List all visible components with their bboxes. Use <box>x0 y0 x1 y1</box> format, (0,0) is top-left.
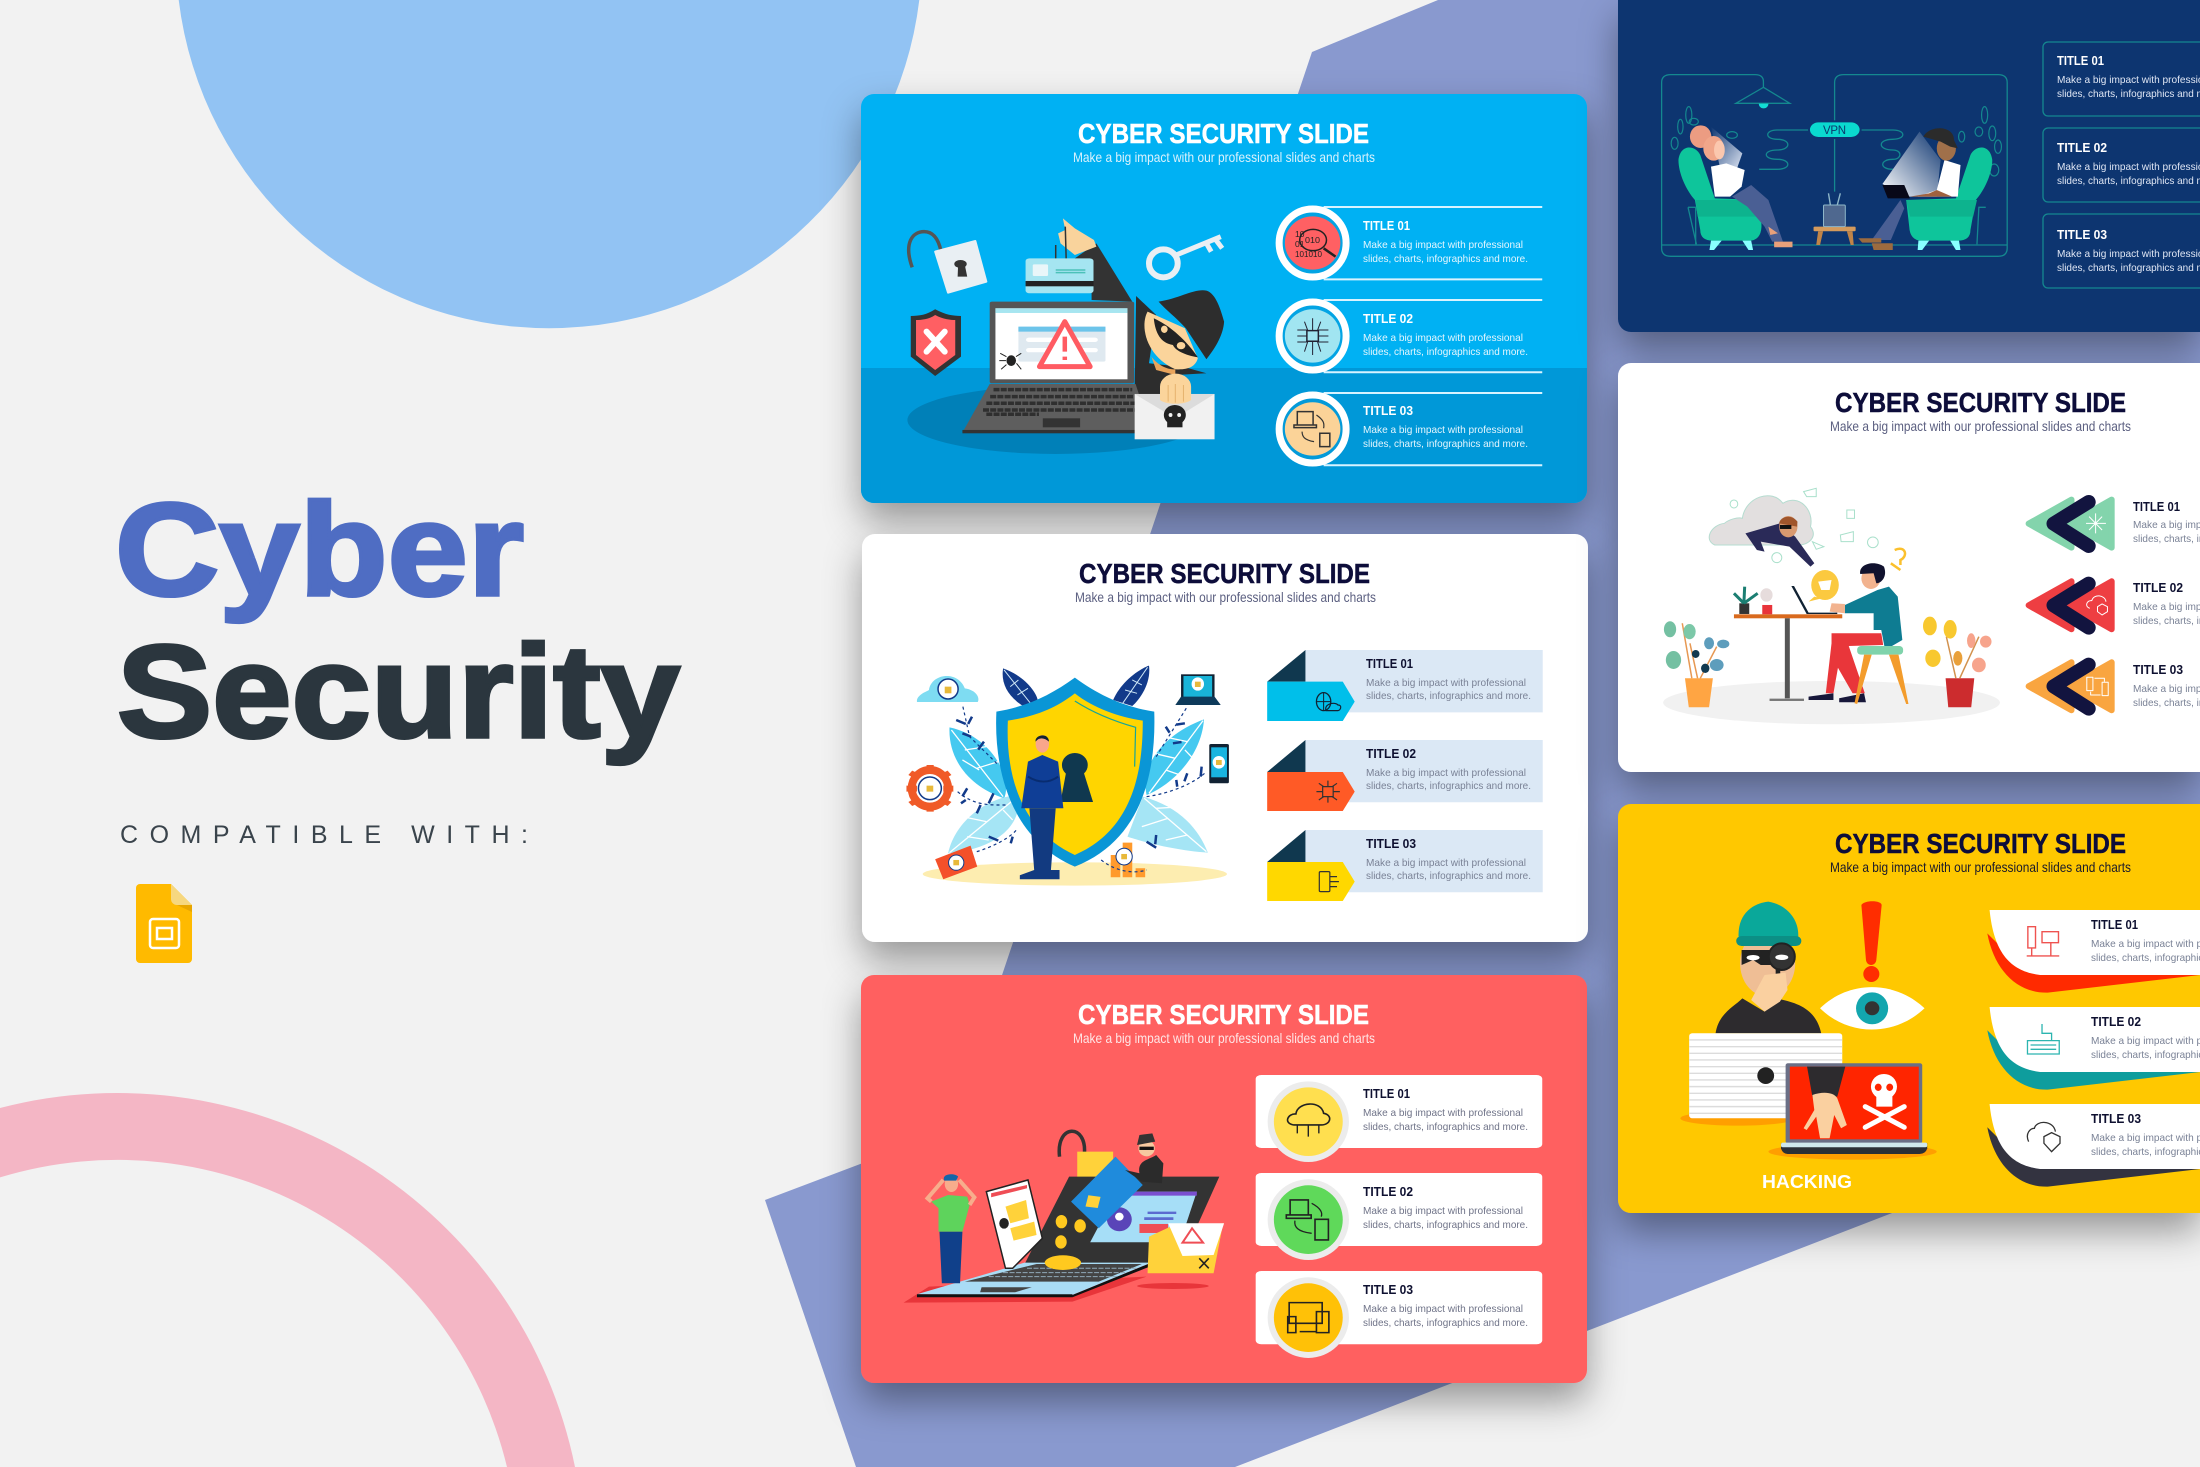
row 3 text <box>1366 836 1531 882</box>
subtitle: Make a big impact with our professional slides and charts <box>1075 589 1376 605</box>
row 2 text <box>1366 746 1531 792</box>
panel: white shield slide <box>862 534 1588 942</box>
binary digits in magnifier icon <box>1295 229 1322 259</box>
row 3 swoosh <box>1987 1104 2200 1187</box>
row 1 text <box>2057 53 2200 100</box>
heading: CYBER SECURITY SLIDE <box>1078 118 1369 149</box>
VPN label: VPN <box>1823 125 1846 137</box>
list: arrow chevron icons <box>2029 500 2112 710</box>
row 1 text: slides, charts, infographics and more. <box>1363 253 1528 265</box>
panel: yellow hacking slide <box>1618 804 2200 1213</box>
row 1 text <box>2133 499 2200 545</box>
row 2 text: TITLE 02 <box>1363 1184 1413 1199</box>
arrow icon 3 <box>2029 662 2112 710</box>
row 3 text: Make a big impact with professional <box>1363 424 1523 436</box>
row 1 text <box>2091 917 2200 964</box>
row 2 text: TITLE 02 <box>2057 140 2107 155</box>
heading: CYBER SECURITY SLIDE <box>1835 828 2126 859</box>
decorative light blue circle <box>179 0 919 328</box>
row 3 text <box>1363 403 1528 450</box>
panel: white phishing slide <box>1618 363 2200 772</box>
row 3 text: slides, charts, infographics and more. <box>1363 1317 1528 1329</box>
list: hacking slide rows <box>1987 910 2200 1187</box>
row 1 text: Make a big impact with professional <box>1366 677 1526 689</box>
illustration: hacker with magnifier <box>1680 901 1937 1160</box>
tab icon: globe and cloud <box>1267 682 1355 721</box>
row 1 text: TITLE 01 <box>1366 656 1413 671</box>
row 2 text: Make a big impact with professional <box>1363 1205 1523 1217</box>
row 1 text: Make a big impact with professional <box>1363 239 1523 251</box>
row 3 text <box>2091 1111 2200 1158</box>
row 1 swoosh <box>1987 910 2200 993</box>
heading: CYBER SECURITY SLIDE <box>1835 387 2126 418</box>
row 3 text: TITLE 03 <box>2057 227 2107 242</box>
illustration: laptop attack <box>904 1131 1224 1303</box>
decorative pink ring <box>0 1093 575 1467</box>
icon circle: responsive devices <box>1268 1277 1349 1358</box>
compatible with label: COMPATIBLE WITH: <box>120 821 528 849</box>
HACKING label: HACKING <box>1762 1172 1852 1192</box>
arrow icon 1 <box>2029 500 2112 548</box>
row 1 text: TITLE 01 <box>1363 218 1410 233</box>
row 1 text: TITLE 01 <box>1363 1086 1410 1101</box>
row 1 text <box>1366 656 1531 702</box>
row 2 text <box>1363 1184 1528 1231</box>
panel: blue slide <box>861 94 1587 503</box>
illustration: shield and man <box>906 666 1229 886</box>
row 2 text: Make a big impact with professional <box>1363 332 1523 344</box>
row 2 text: slides, charts, infographics and more. <box>1363 346 1528 358</box>
row 3 text: slides, charts, infographics and more. <box>1363 438 1528 450</box>
row 3 text: Make a big impact with professional <box>1363 1303 1523 1315</box>
floor band <box>861 368 1587 503</box>
subtitle: Make a big impact with our professional slides and charts <box>1073 1030 1375 1046</box>
row 2 text: slides, charts, infographics and more. <box>1366 780 1531 792</box>
arrow icon 2 <box>2029 581 2112 629</box>
row 1 text: TITLE 01 <box>2091 917 2138 932</box>
row 1 text <box>1363 1086 1528 1133</box>
decorative purple shape <box>765 0 2200 1467</box>
illustration: phishing at desk <box>1663 488 2000 724</box>
binary digits in magnifier icon: 01 <box>1295 239 1305 249</box>
heading: CYBER SECURITY SLIDE <box>1079 558 1370 589</box>
row 2 text: TITLE 02 <box>2091 1014 2141 1029</box>
row 3 text: TITLE 03 <box>1363 1282 1413 1297</box>
row 2 text <box>2057 140 2200 187</box>
subtitle: Make a big impact with our professional slides and charts <box>1073 149 1375 165</box>
row 2 text: slides, charts, infographics and more. <box>1363 1219 1528 1231</box>
row 1 text <box>1363 218 1528 265</box>
subtitle: Make a big impact with our professional slides and charts <box>1830 418 2131 434</box>
icon circle: cloud network <box>1268 1081 1349 1162</box>
row 3 text: TITLE 03 <box>2133 662 2183 677</box>
row 2 text <box>2133 580 2200 627</box>
row 2 text <box>1363 311 1528 358</box>
row 3 text <box>2133 662 2200 709</box>
panel: red slide <box>861 975 1587 1383</box>
row 1 text: TITLE 01 <box>2057 53 2104 68</box>
row 3 text <box>1363 1282 1528 1329</box>
list: blue slide rows <box>1279 207 1542 465</box>
row 3 text: TITLE 03 <box>1366 836 1416 851</box>
tab icon: circuit <box>1267 772 1355 811</box>
binary digits in magnifier icon: 010 <box>1305 235 1320 245</box>
illustration: VPN remote workers <box>1662 75 2007 256</box>
row 2 text: Make a big impact with professional <box>1366 767 1526 779</box>
binary digits in magnifier icon: 101010 <box>1295 249 1322 259</box>
row 3 text: slides, charts, infographics and more. <box>1366 870 1531 882</box>
panel: navy VPN slide <box>1618 0 2200 332</box>
row 3 text: Make a big impact with professional <box>1366 857 1526 869</box>
row 2 swoosh <box>1987 1007 2200 1090</box>
icon circle: devices transfer <box>1268 1179 1349 1260</box>
heading: CYBER SECURITY SLIDE <box>1078 999 1369 1030</box>
row 2 text: TITLE 02 <box>2133 580 2183 595</box>
row 3 text: TITLE 03 <box>2091 1111 2141 1126</box>
main title: Cyber <box>115 476 524 623</box>
row 3 text <box>2057 227 2200 274</box>
subtitle: Make a big impact with our professional slides and charts <box>1830 859 2131 875</box>
main title <box>115 476 680 765</box>
list: navy slide rows <box>2043 42 2200 288</box>
row 1 text: Make a big impact with professional <box>1363 1107 1523 1119</box>
illustration: hacker with laptop <box>907 218 1224 454</box>
row 1 text: slides, charts, infographics and more. <box>1366 690 1531 702</box>
list: red slide rows <box>1256 1075 1542 1358</box>
row 3 text: TITLE 03 <box>1363 403 1413 418</box>
row 2 text: TITLE 02 <box>1366 746 1416 761</box>
list: shield slide rows <box>1267 650 1543 901</box>
binary digits in magnifier icon: 10 <box>1295 229 1305 239</box>
row icons and rules <box>1279 207 1542 465</box>
icon: google slides <box>136 884 192 963</box>
row 1 text: TITLE 01 <box>2133 499 2180 514</box>
row 2 text: TITLE 02 <box>1363 311 1413 326</box>
tab icon: device circuit <box>1267 862 1355 901</box>
row 1 text: slides, charts, infographics and more. <box>1363 1121 1528 1133</box>
row 2 text <box>2091 1014 2200 1061</box>
main title: Security <box>117 618 680 765</box>
